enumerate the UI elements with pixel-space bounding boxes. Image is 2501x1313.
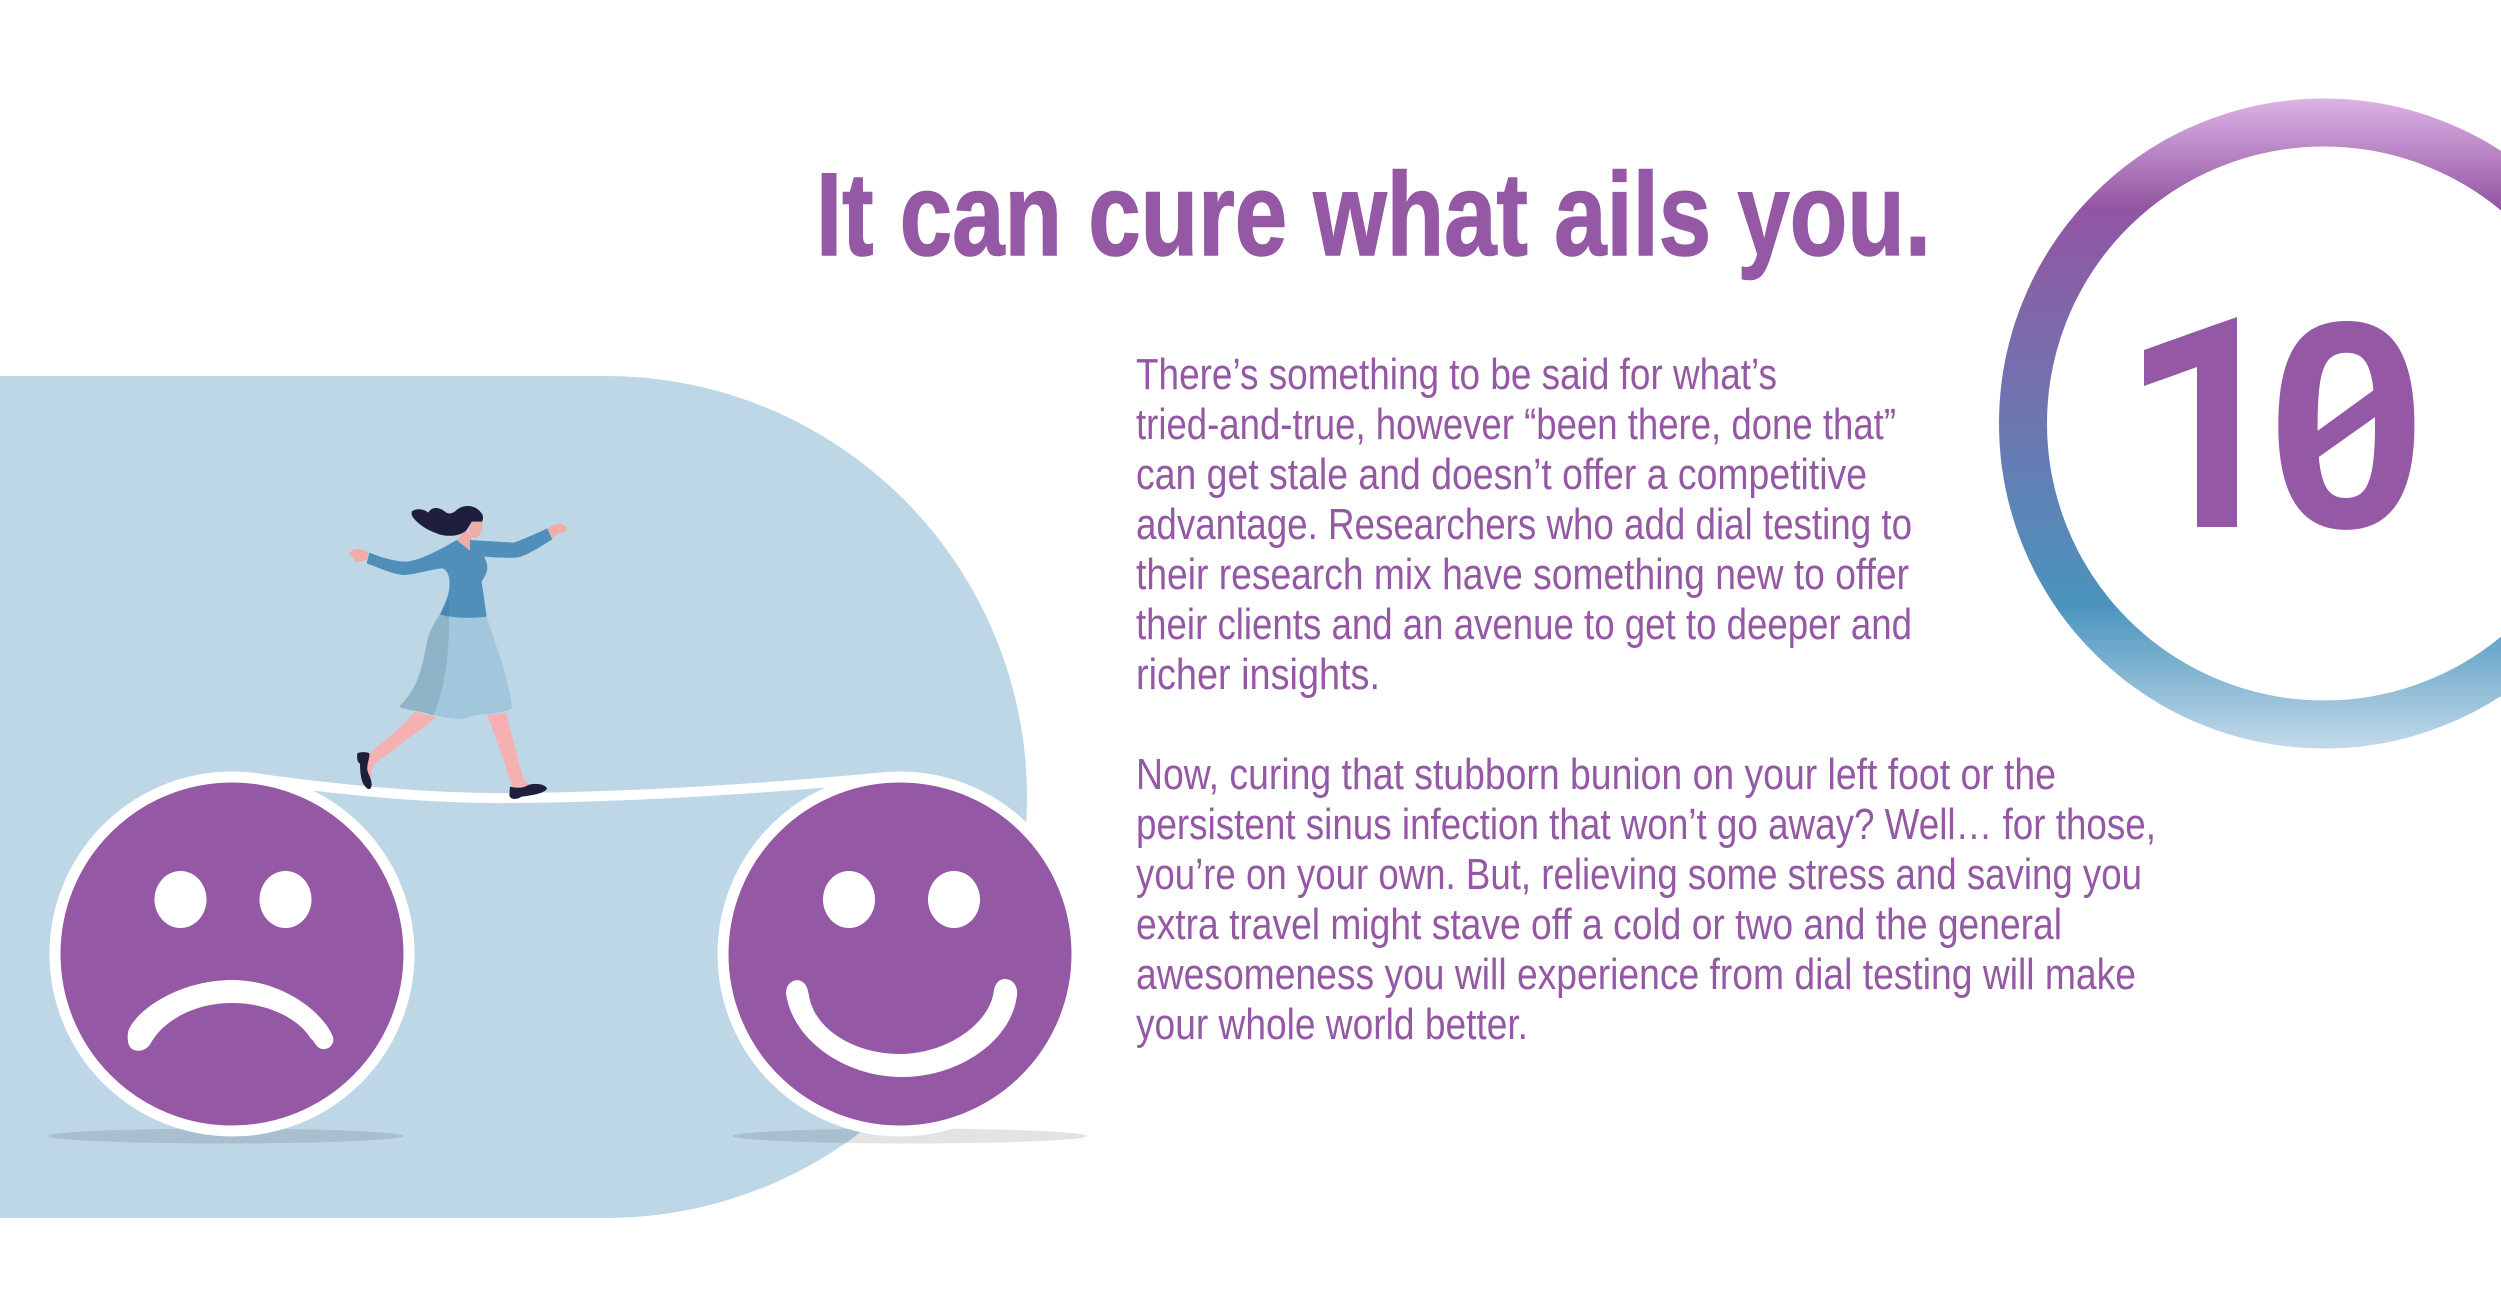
background panel: blue rounded shape [0,376,1027,1218]
number 10: 0 [2267,260,2426,590]
title: It can cure what ails you. [816,149,1931,281]
text block: second paragraph: your whole world better. [1136,1000,1528,1049]
text block: second paragraph: Now, curing that stubborn bunion on your left foot or the [1136,750,2056,799]
text block: first paragraph: advantage. Researchers who add dial testing to [1136,500,1912,549]
text block: second paragraph: extra travel might stave off a cold or two and the general [1136,900,2062,949]
tightrope [245,777,888,798]
text block: first paragraph: can get stale and doesn’t offer a competitive [1136,450,1867,499]
number 10: 1 [2146,261,2269,590]
number 10 [2100,260,2426,590]
figure: woman balancing on the rope [348,506,567,799]
text block: first paragraph: richer insights. [1136,650,1380,699]
text block: first paragraph: tried-and-true, however “been there, done that” [1136,400,1896,449]
text block: first paragraph: their clients and an avenue to get to deeper and [1136,600,1912,649]
text block: second paragraph: you’re on your own. But, relieving some stress and saving you [1136,850,2142,899]
text block: first paragraph: There’s something to be said for what’s [1136,350,1777,399]
icon: happy face [723,777,1077,1131]
ground shadows [48,1128,1087,1144]
text block: second paragraph: awesomeness you will experience from dial testing will make [1136,950,2136,999]
text block: second paragraph: persistent sinus infection that won’t go away? Well… for those, [1136,800,2156,849]
text block: second paragraph [1136,750,2156,1049]
ring with gradient [2023,122,2501,724]
icon: sad face [55,777,409,1131]
text block: first paragraph: their research mix have something new to offer [1136,550,1909,599]
text block: first paragraph [1136,350,1912,699]
